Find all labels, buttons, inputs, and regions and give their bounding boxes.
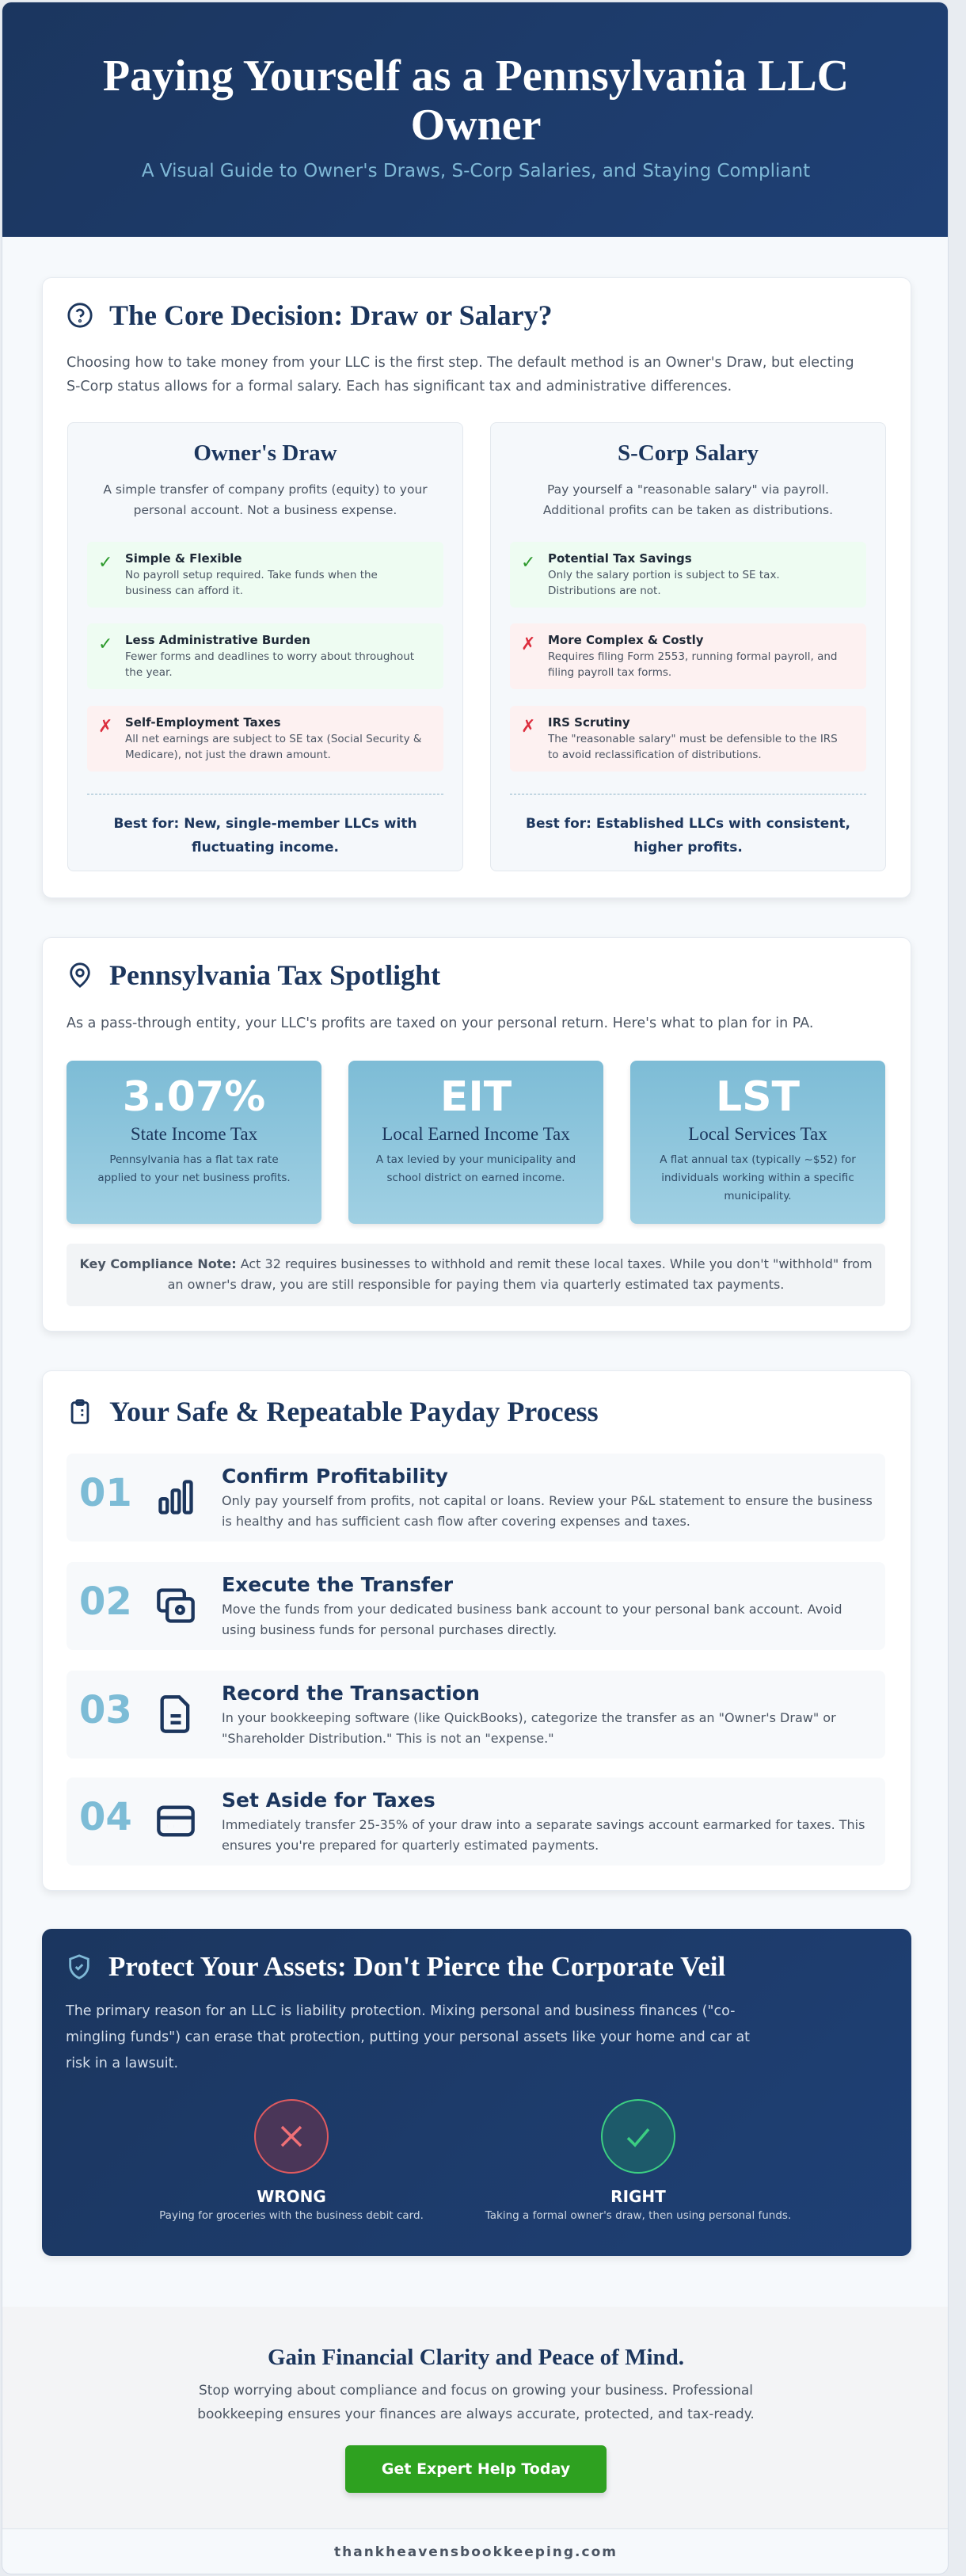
stat: LST: A flat annual tax (typically ~$52) for individuals working within a specific municipality. <box>660 1153 856 1202</box>
wrong example <box>159 2099 424 2222</box>
CTA text: Stop worrying about compliance and focus on growing your business. Professional bookkeeping ensures your finances are always accurate, protected, and tax-ready. <box>197 2383 755 2422</box>
pro: savings: Only the salary portion is subject to SE tax. <box>548 569 780 581</box>
step 4: 04 <box>79 1795 132 1839</box>
pro: less admin: Fewer forms and deadlines to worry about throughout <box>125 650 414 663</box>
footer: thankheavensbookkeeping.com <box>334 2544 618 2560</box>
pro: savings: Potential Tax Savings <box>548 551 692 566</box>
pro: less admin: the year. <box>125 666 173 679</box>
step 4 <box>67 1778 885 1865</box>
sub-panel: owner's draw: A simple transfer of company profits (equity) to your <box>103 482 428 497</box>
intro text: S-Corp status allows for a formal salary. Each has significant tax and administrative differences. <box>67 379 732 394</box>
panel: protect your assets <box>42 1929 911 2256</box>
pro: less admin <box>87 623 443 689</box>
con: IRS <box>510 706 866 772</box>
intro text: Choosing how to take money from your LLC is the first step. The default method is an Owner's Draw, but electing <box>67 355 854 371</box>
pro: simple: Simple & Flexible <box>125 551 242 566</box>
con: SE tax <box>87 706 443 772</box>
step 3: In your bookkeeping software (like QuickBooks), categorize the transfer as an "Owner's Draw" or <box>222 1710 836 1725</box>
title: Owner <box>411 101 541 150</box>
con: complex: ✗ <box>521 634 535 654</box>
stat: LST: LST <box>716 1073 800 1121</box>
step 1 <box>67 1454 885 1541</box>
stat: state income tax: 3.07% <box>123 1073 265 1121</box>
stat: LST: Local Services Tax <box>688 1124 827 1144</box>
step 1: is healthy and has sufficient cash flow after covering expenses and taxes. <box>222 1514 690 1529</box>
step 2: 02 <box>79 1580 132 1624</box>
step 2: Move the funds from your dedicated business bank account to your personal bank account. Avoid <box>222 1602 842 1617</box>
sub-panel: s-corp salary: Pay yourself a "reasonable salary" via payroll. <box>547 482 829 497</box>
con: complex: Requires filing Form 2553, running formal payroll, and <box>548 650 838 663</box>
sub-panel: s-corp salary: S-Corp Salary <box>618 440 759 466</box>
step 1: 01 <box>79 1471 132 1515</box>
heading: core decision: The Core Decision: Draw or Salary? <box>109 299 553 331</box>
best for: Best for: Established LLCs with consistent, higher profits. <box>526 816 850 855</box>
panel: payday process <box>42 1370 911 1891</box>
con: SE tax: Medicare), not just the drawn amount. <box>125 749 331 761</box>
title <box>103 51 849 150</box>
pro: less admin: Less Administrative Burden <box>125 633 310 647</box>
best for: Best for: New, single-member LLCs with fluctuating income. <box>113 816 417 855</box>
step 2 <box>67 1562 885 1650</box>
compliance note: Key Compliance Note: Act 32 requires businesses to withhold and remit these local taxes. While you don't "withhold" from <box>79 1256 873 1271</box>
sub-panel: owner's draw: Owner's Draw <box>193 440 337 466</box>
CTA button <box>345 2445 607 2493</box>
pro: savings <box>510 542 866 608</box>
con: complex: filing payroll tax forms. <box>548 666 671 679</box>
con: complex: More Complex & Costly <box>548 633 704 647</box>
sub-panel: s-corp salary <box>490 422 886 871</box>
pro: savings: ✓ <box>521 553 535 573</box>
header <box>2 2 949 237</box>
step 1: Confirm Profitability <box>222 1465 448 1488</box>
con: IRS: The "reasonable salary" must be defensible to the IRS <box>548 733 838 745</box>
con: IRS: to avoid reclassification of distributions. <box>548 749 762 761</box>
con: SE tax: Self-Employment Taxes <box>125 715 281 730</box>
wrong example: Paying for groceries with the business debit card. <box>159 2209 424 2222</box>
body text <box>65 2003 750 2071</box>
heading: protect: Protect Your Assets: Don't Pierce the Corporate Veil <box>108 1951 725 1982</box>
stat: EIT: A tax levied by your municipality and school district on earned income. <box>376 1153 576 1184</box>
sub-panel: s-corp salary: Additional profits can be taken as distributions. <box>543 503 833 517</box>
step 4: Set Aside for Taxes <box>222 1789 435 1812</box>
stat: state income tax: State Income Tax <box>131 1124 257 1144</box>
heading: payday: Your Safe & Repeatable Payday Process <box>109 1396 599 1427</box>
best for <box>87 794 443 859</box>
pro: savings: Distributions are not. <box>548 585 661 597</box>
step 3: "Shareholder Distribution." This is not an "expense." <box>222 1731 554 1746</box>
pro: simple: ✓ <box>98 553 112 573</box>
right example <box>485 2099 791 2222</box>
panel: core decision <box>42 277 911 898</box>
step 2: Execute the Transfer <box>222 1573 453 1596</box>
compliance note: an owner's draw, you are still responsible for paying them via quarterly estimated tax payments. <box>168 1277 784 1292</box>
heading: PA tax: Pennsylvania Tax Spotlight <box>109 959 440 991</box>
step 3 <box>67 1671 885 1759</box>
stat: EIT <box>348 1061 603 1224</box>
con: IRS: ✗ <box>521 717 535 737</box>
step 3: Record the Transaction <box>222 1682 480 1705</box>
intro text <box>67 355 854 394</box>
con: IRS: IRS Scrutiny <box>548 715 630 730</box>
CTA button: Get Expert Help Today <box>382 2460 570 2478</box>
body text: mingling funds") can erase that protection, putting your personal assets like your home and car at <box>66 2029 750 2045</box>
con: SE tax: All net earnings are subject to SE tax (Social Security & <box>125 733 421 745</box>
pro: less admin: ✓ <box>98 634 112 654</box>
stat: EIT: Local Earned Income Tax <box>382 1124 570 1144</box>
title: Paying Yourself as a Pennsylvania LLC <box>103 51 849 101</box>
stat: LST <box>630 1061 885 1224</box>
pro: simple <box>87 542 443 608</box>
body text: risk in a lawsuit. <box>66 2056 178 2071</box>
step 3: 03 <box>79 1688 132 1732</box>
con: complex <box>510 623 866 689</box>
compliance note <box>67 1244 885 1306</box>
sub-panel: owner's draw: personal account. Not a business expense. <box>134 503 397 517</box>
step 4: Immediately transfer 25-35% of your draw into a separate savings account earmarked for taxes. This <box>222 1817 865 1832</box>
sub-panel: owner's draw <box>67 422 463 871</box>
CTA heading: Gain Financial Clarity and Peace of Mind. <box>268 2345 684 2370</box>
con: SE tax: ✗ <box>98 717 112 737</box>
step 1: Only pay yourself from profits, not capital or loans. Review your P&L statement to ensure the business <box>222 1493 873 1508</box>
step 2: using business funds for personal purchases directly. <box>222 1622 557 1637</box>
CTA section <box>2 2307 949 2528</box>
stat: state income tax: Pennsylvania has a flat tax rate applied to your net business profits. <box>97 1153 291 1184</box>
wrong example: WRONG <box>257 2187 326 2206</box>
panel: PA tax spotlight <box>42 937 911 1332</box>
intro text: As a pass-through entity, your LLC's profits are taxed on your personal return. Here's what to plan for in PA. <box>67 1016 813 1031</box>
footer <box>2 2528 949 2575</box>
right example: Taking a formal owner's draw, then using personal funds. <box>485 2209 791 2222</box>
pro: simple: No payroll setup required. Take funds when the <box>125 569 378 581</box>
step 4: ensures you're prepared for quarterly estimated payments. <box>222 1838 599 1853</box>
pro: simple: business can afford it. <box>125 585 243 597</box>
body text: The primary reason for an LLC is liability protection. Mixing personal and business finances ("co- <box>66 2003 735 2019</box>
right example: RIGHT <box>610 2187 666 2206</box>
subtitle: A Visual Guide to Owner's Draws, S-Corp Salaries, and Staying Compliant <box>142 161 810 181</box>
stat: state income tax <box>67 1061 321 1224</box>
stat: EIT: EIT <box>440 1073 512 1121</box>
best for <box>510 794 866 859</box>
